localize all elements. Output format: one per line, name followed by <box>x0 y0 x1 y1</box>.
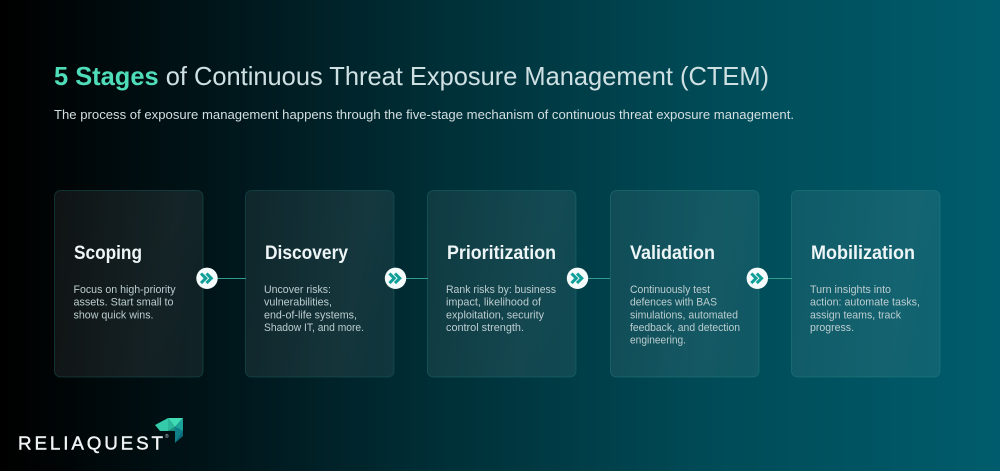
logo wordmark: RELIAQUEST <box>18 433 164 454</box>
text: mobilization <box>810 284 920 334</box>
heading: scoping: Scoping <box>74 243 142 264</box>
text: scoping <box>74 284 176 321</box>
text: scoping: Focus on high-priority <box>74 284 176 296</box>
heading: validation: Validation <box>630 243 715 264</box>
arrow: scoping to discovery <box>196 268 246 289</box>
heading: prioritization: Prioritization <box>447 243 556 264</box>
icon: logo mark <box>155 418 183 443</box>
text: mobilization: action: automate tasks, <box>810 297 920 309</box>
logo: reliaquest <box>18 418 183 454</box>
text: validation: defences with BAS <box>630 297 717 309</box>
text: validation: Continuously test <box>630 284 711 296</box>
panel: scoping <box>54 190 203 377</box>
text: discovery: Uncover risks: <box>264 284 331 296</box>
arrow: prioritization to validation <box>567 268 610 289</box>
text: mobilization: Turn insights into <box>810 284 891 296</box>
text: validation <box>630 284 740 347</box>
text: scoping: show quick wins. <box>74 309 154 321</box>
panel: mobilization <box>792 190 940 377</box>
heading: discovery: Discovery <box>265 243 348 264</box>
text: prioritization <box>446 284 556 334</box>
title: 5 Stages of Continuous Threat Exposure Management (CTEM) <box>54 61 769 91</box>
text: mobilization: progress. <box>810 322 854 334</box>
text: discovery: end-of-life systems, <box>264 309 357 321</box>
text: prioritization: exploitation, security <box>446 309 544 321</box>
text: discovery <box>264 284 364 334</box>
text: discovery: Shadow IT, and more. <box>264 322 364 334</box>
text: scoping: assets. Start small to <box>74 297 174 309</box>
text: prioritization: impact, likelihood of <box>446 297 542 309</box>
heading: mobilization: Mobilization <box>811 243 915 264</box>
panel: prioritization <box>428 190 576 377</box>
text: discovery: vulnerabilities, <box>264 297 332 309</box>
arrow: discovery to prioritization <box>385 268 428 289</box>
text: mobilization: assign teams, track <box>810 309 901 321</box>
panel: discovery <box>246 190 394 377</box>
subtitle: The process of exposure management happens through the five-stage mechanism of continuous threat exposure management. <box>54 107 794 122</box>
arrow: validation to mobilization <box>747 268 792 289</box>
text: validation: simulations, automated <box>630 309 738 321</box>
text: validation: feedback, and detection <box>630 322 740 334</box>
text: prioritization: Rank risks by: business <box>446 284 556 296</box>
logo registered mark: ® <box>165 433 169 440</box>
text: prioritization: control strength. <box>446 322 524 334</box>
panel: validation <box>610 190 759 377</box>
text: validation: engineering. <box>630 335 686 347</box>
